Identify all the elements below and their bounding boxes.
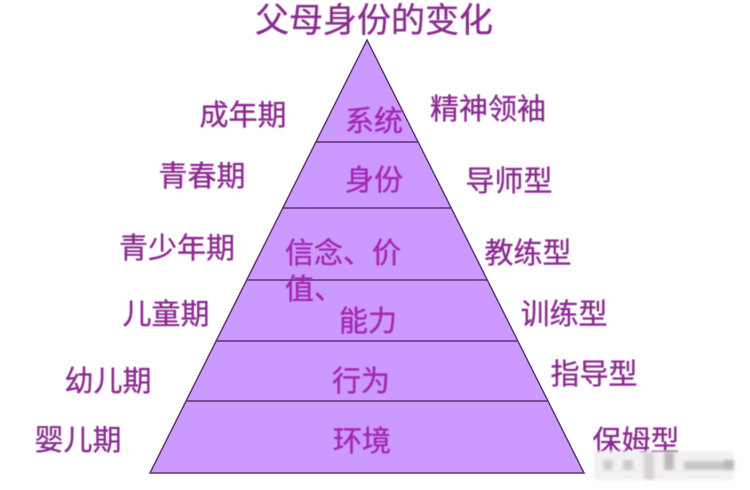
left labels: life stages bbox=[34, 99, 287, 457]
right labels: parent roles: 教练型 bbox=[484, 237, 572, 270]
layer label: 信念、价值、能力: 能力 bbox=[339, 305, 397, 338]
layer label: 身份: 身份 bbox=[345, 164, 403, 197]
layer label: 信念、价值、能力: 值、 bbox=[285, 273, 343, 306]
title: 父母身份的变化 bbox=[255, 2, 493, 40]
right labels: parent roles: 导师型 bbox=[465, 165, 553, 198]
layer label: 信念、价值、能力: 信念、价 bbox=[285, 237, 401, 270]
pyramid chart bbox=[150, 40, 584, 473]
layer label: 信念、价值、能力 bbox=[285, 237, 401, 338]
right labels: parent roles: 保姆型 bbox=[592, 425, 680, 458]
layer dividers bbox=[186, 142, 548, 401]
blurred watermark bbox=[594, 451, 734, 480]
right labels: parent roles bbox=[430, 93, 680, 458]
right labels: parent roles: 训练型 bbox=[520, 298, 608, 331]
pyramid body bbox=[150, 40, 584, 473]
left labels: life stages: 青少年期 bbox=[119, 232, 235, 265]
left labels: life stages: 青春期 bbox=[158, 160, 246, 193]
layer label: 行为: 行为 bbox=[332, 365, 390, 398]
left labels: life stages: 成年期 bbox=[199, 99, 287, 132]
left labels: life stages: 儿童期 bbox=[122, 298, 210, 331]
layer label: 环境: 环境 bbox=[333, 425, 391, 458]
left labels: life stages: 婴儿期 bbox=[34, 425, 122, 457]
left labels: life stages: 幼儿期 bbox=[64, 365, 152, 398]
right labels: parent roles: 指导型 bbox=[550, 358, 638, 391]
right labels: parent roles: 精神领袖 bbox=[430, 93, 546, 126]
layer label: 系统: 系统 bbox=[345, 105, 403, 138]
